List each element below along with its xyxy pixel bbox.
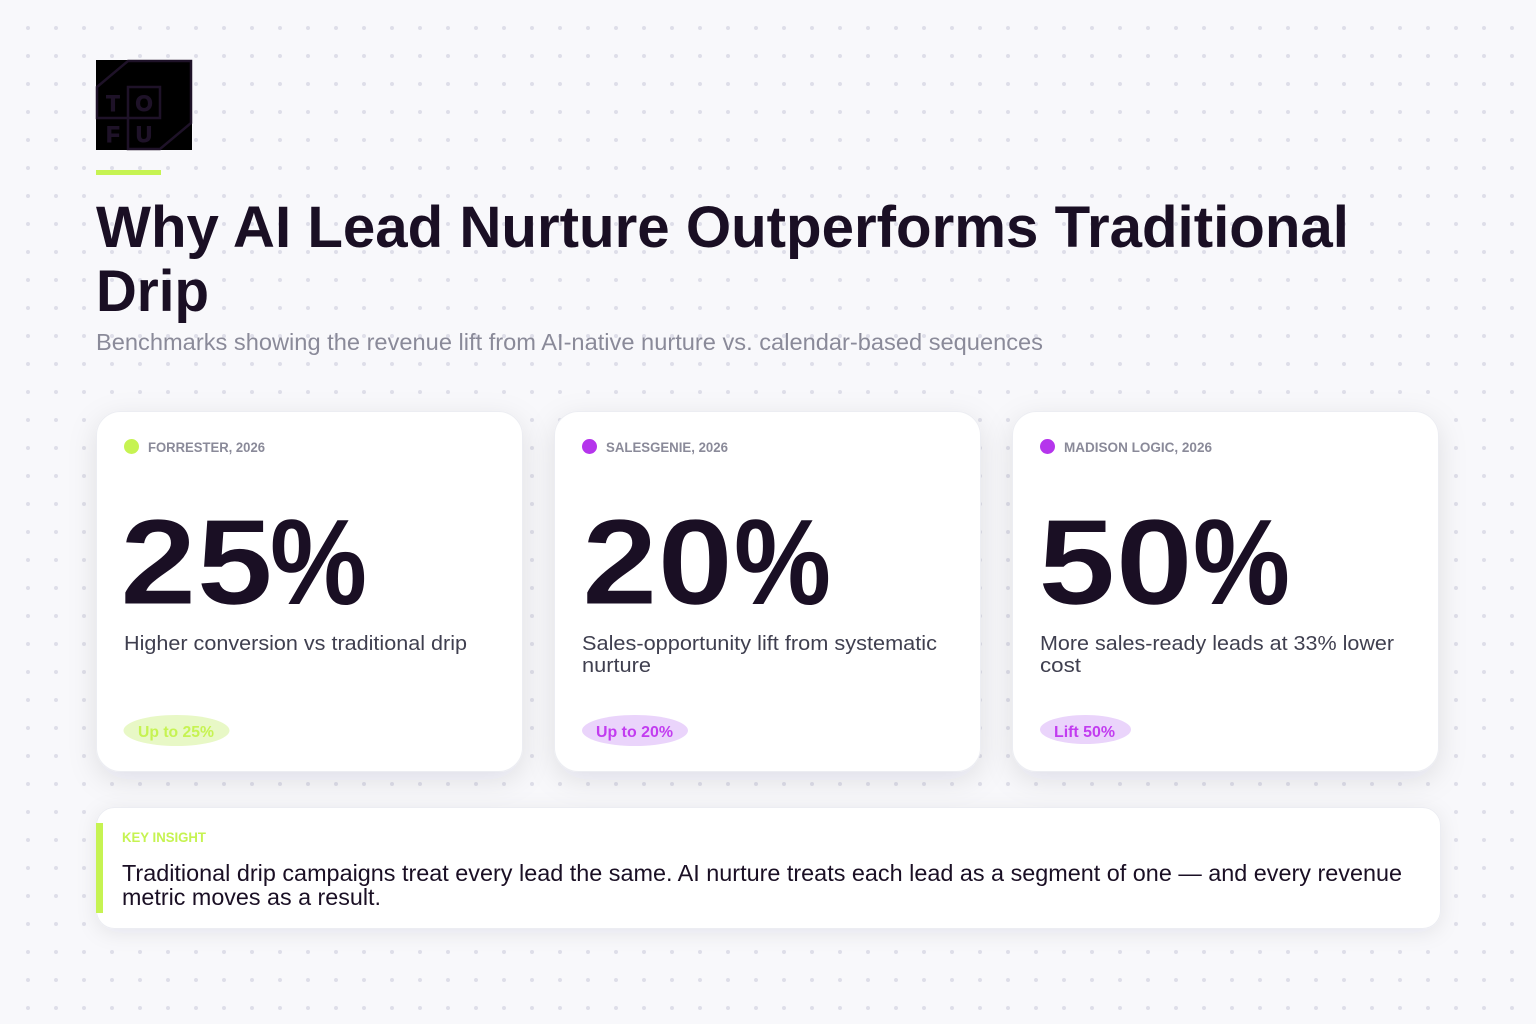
- source: SalesGenie: SALESGENIE, 2026: [606, 440, 728, 455]
- stat: 20%: %: [734, 494, 831, 630]
- source: Forrester: FORRESTER, 2026: [148, 440, 265, 455]
- panel: Forrester stat card: [96, 412, 522, 772]
- description: cost: [1040, 655, 1081, 677]
- source: Madison Logic: MADISON LOGIC, 2026: [1064, 440, 1212, 455]
- stat: 20%: [582, 494, 831, 630]
- subtitle: Benchmarks showing the revenue lift from AI-native nurture vs. calendar-based sequences: [96, 329, 1043, 355]
- badge: Up to 20%: [582, 715, 688, 746]
- insight text: metric moves as a result.: [122, 884, 381, 910]
- description: [1040, 633, 1394, 677]
- badge: Up to 25%: [124, 715, 230, 746]
- stat: 50%: [1038, 494, 1290, 630]
- stat: 50%: %: [1193, 494, 1290, 630]
- description: [582, 633, 937, 677]
- logo: TOFU: U: [136, 122, 152, 147]
- badge: Up to 25%: Up to 25%: [138, 724, 214, 741]
- stat: 25%: 25: [120, 494, 273, 630]
- stat: 25%: %: [270, 494, 367, 630]
- description: Higher conversion vs traditional drip: [124, 633, 467, 655]
- panel: key insight: [96, 808, 1440, 928]
- badge: Up to 20%: Up to 20%: [596, 724, 673, 741]
- description: nurture: [582, 655, 651, 677]
- accent bar: [96, 170, 161, 175]
- insight accent bar: [96, 823, 103, 913]
- stat: 50%: 50: [1038, 494, 1193, 630]
- title: [96, 195, 1349, 324]
- badge: Lift 50%: Lift 50%: [1054, 724, 1115, 741]
- logo: TOFU: [96, 60, 192, 150]
- description: Sales-opportunity lift from systematic: [582, 633, 937, 655]
- title: Why AI Lead Nurture Outperforms Traditional: [96, 195, 1349, 260]
- title: Drip: [96, 259, 209, 324]
- stat: 25%: [120, 494, 367, 630]
- badge: Lift 50%: [1040, 715, 1131, 744]
- insight label: KEY INSIGHT: [122, 830, 207, 845]
- stat: 20%: 20: [582, 494, 733, 630]
- insight text: [122, 860, 1402, 910]
- description: More sales-ready leads at 33% lower: [1040, 633, 1394, 655]
- panel: Madison Logic stat card: [1012, 412, 1438, 772]
- panel: SalesGenie stat card: [554, 412, 980, 772]
- logo: TOFU: F: [106, 122, 120, 147]
- insight text: Traditional drip campaigns treat every lead the same. AI nurture treats each lead as a segment of one — and every revenue: [122, 860, 1402, 886]
- logo: TOFU: O: [135, 91, 153, 116]
- logo: TOFU: T: [106, 91, 120, 116]
